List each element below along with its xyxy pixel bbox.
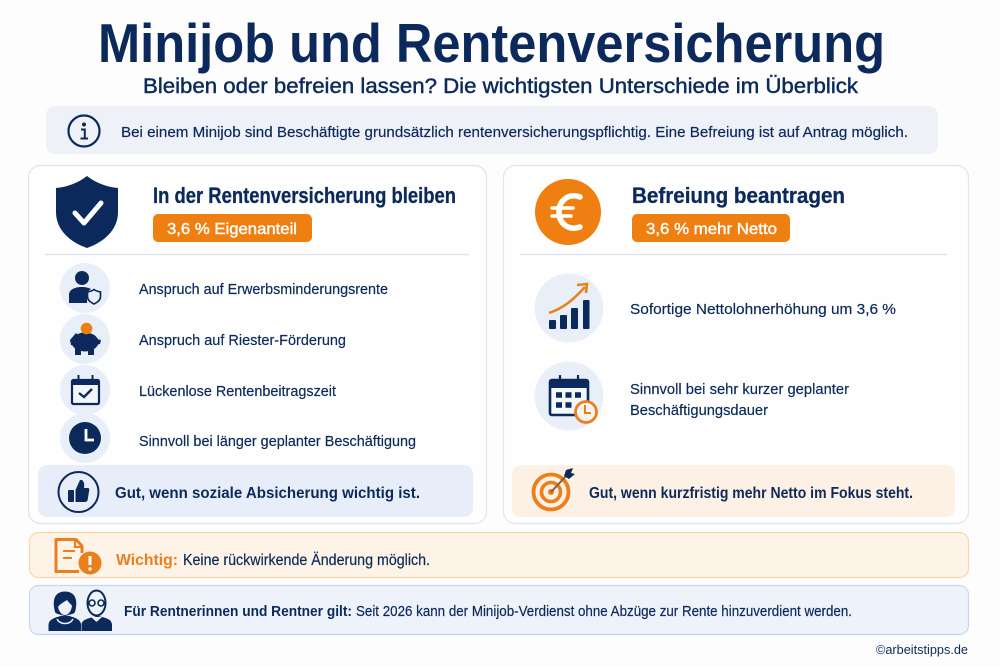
icon: euro: [535, 179, 601, 245]
item: längere Beschäftigung: Sinnvoll bei länger geplanter Beschäftigung: [139, 433, 416, 450]
notice: Wichtig: Keine rückwirkende Änderung möglich.: [183, 552, 430, 569]
panel heading: Befreiung beantragen: [632, 183, 845, 208]
item: längere Beschäftigung: [60, 413, 416, 463]
callout: soziale Absicherung: Gut, wenn soziale Absicherung wichtig ist.: [115, 485, 420, 502]
badge: Eigenanteil: [153, 214, 312, 242]
item: Nettolohnerhöhung: [534, 274, 896, 342]
icon: info: [68, 116, 100, 146]
panel: Befreiung beantragen: [504, 166, 968, 524]
credit: ©arbeitstipps.de: [876, 642, 968, 657]
icon: document warning: [56, 540, 102, 574]
icon: thumbs up: [58, 472, 98, 512]
icon: shield: [56, 176, 118, 248]
item: Erwerbsminderungsrente: [60, 263, 388, 313]
badge: mehr Netto: 3,6 % mehr Netto: [646, 221, 777, 238]
notice: Wichtig: [30, 532, 968, 578]
item: Riester-Förderung: Anspruch auf Riester-Förderung: [139, 332, 346, 349]
badge: mehr Netto: [632, 214, 790, 242]
notice text: Für Rentnerinnen und Rentner gilt:: [124, 604, 352, 620]
panel: in der Rentenversicherung bleiben: [28, 166, 486, 524]
info text: Bei einem Minijob sind Beschäftigte grundsätzlich rentenversicherungspflichtig. Eine Befreiung ist auf Antrag möglich.: [121, 124, 908, 141]
item: Riester-Förderung: [60, 314, 346, 364]
item: kurze Beschäftigungsdauer: [534, 362, 849, 430]
icon: pensioners: [48, 590, 112, 631]
item: kurze Beschäftigungsdauer: Sinnvoll bei sehr kurzer geplanter: [630, 381, 849, 398]
badge: Eigenanteil: 3,6 % Eigenanteil: [167, 221, 297, 238]
item: kurze Beschäftigungsdauer: Beschäftigungsdauer: [630, 402, 768, 419]
notice: Rentnerinnen und Rentner: Seit 2026 kann der Minijob-Verdienst ohne Abzüge zur Rente hinzuverdient werden.: [356, 604, 852, 620]
notice: Rentnerinnen und Rentner: [30, 586, 968, 634]
panel heading: In der Rentenversicherung bleiben: [153, 183, 456, 208]
callout: mehr Netto: [512, 465, 955, 517]
item: Nettolohnerhöhung: Sofortige Nettolohnerhöhung um 3,6 %: [630, 301, 896, 318]
callout: soziale Absicherung: [38, 465, 473, 517]
notice text: Wichtig:: [116, 552, 178, 569]
item: Rentenbeitragszeit: [60, 365, 337, 415]
callout: mehr Netto: Gut, wenn kurzfristig mehr Netto im Fokus steht.: [589, 485, 913, 502]
item: Rentenbeitragszeit: Lückenlose Rentenbeitragszeit: [139, 383, 337, 400]
subtitle: Bleiben oder befreien lassen? Die wichtigsten Unterschiede im Überblick: [143, 75, 859, 98]
info banner: [46, 106, 938, 154]
title: Minijob und Rentenversicherung: [98, 12, 885, 74]
item: Erwerbsminderungsrente: Anspruch auf Erwerbsminderungsrente: [139, 281, 388, 298]
icon: target: [534, 468, 575, 510]
